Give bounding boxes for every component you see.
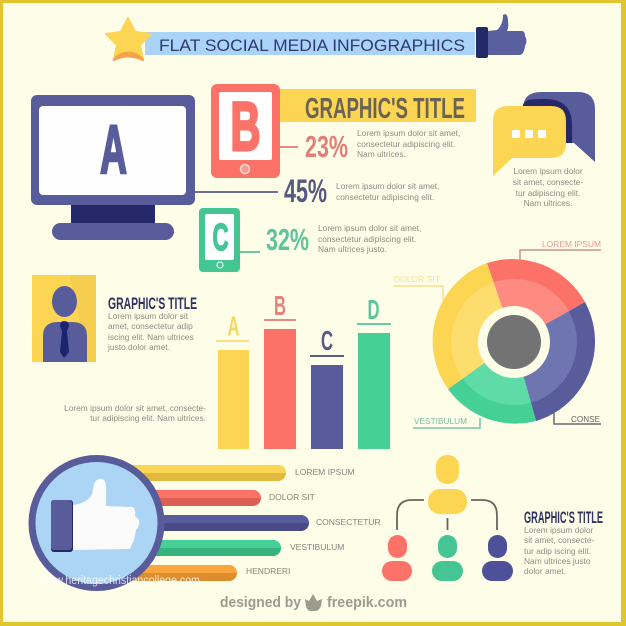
bar labels: VESTIBULUM <box>290 542 344 552</box>
text block: bubble caption: Lorem ipsum dolor <box>513 166 583 176</box>
icon: speech bubbles <box>493 92 595 176</box>
heading and text: person: Lorem ipsum dolor sit <box>108 311 189 321</box>
label: vestibulum <box>413 416 480 428</box>
icon: thumbs up <box>476 14 526 58</box>
org chart <box>382 455 513 581</box>
heading and text: person <box>107 294 197 352</box>
23% stat: 23% <box>305 129 348 164</box>
text block: bar chart note: Lorem ipsum dolor sit amet, consecte- <box>64 403 206 413</box>
label: dolor sit <box>393 274 443 300</box>
23% stat <box>280 128 460 164</box>
text block: bubble caption: sit amet, consecte- <box>513 177 583 187</box>
footer credit: freepik.com <box>327 595 407 611</box>
phone C: C <box>212 217 228 259</box>
bar chart <box>216 290 391 449</box>
footer credit <box>220 594 407 611</box>
heading and text: org chart <box>524 509 603 576</box>
heading and text: person: GRAPHIC'S TITLE <box>108 294 197 313</box>
45% stat: 45% <box>284 173 327 209</box>
45% stat <box>195 173 439 209</box>
icon: like badge <box>32 458 161 588</box>
icon: star <box>106 18 151 60</box>
bar chart: A <box>228 310 240 342</box>
label: lorem ipsum: LOREM IPSUM <box>542 239 601 249</box>
monitor A <box>31 95 195 240</box>
watermark: www.heritagechristiancollege.com <box>39 575 200 587</box>
32% stat: consectetur adipiscing elit. <box>318 234 416 244</box>
bar labels: LOREM IPSUM <box>295 467 355 477</box>
heading and text: person: amet, consectetur adip <box>108 321 193 331</box>
45% stat: Lorem ipsum dolor sit amet, <box>336 181 439 191</box>
45% stat: consectetur adipiscing elit. <box>336 192 434 202</box>
bar chart: D <box>368 294 380 325</box>
phone B <box>211 84 280 178</box>
footer credit: designed by <box>220 595 301 611</box>
text block: bubble caption <box>513 166 583 208</box>
monitor A: A <box>100 111 127 188</box>
label: lorem ipsum <box>520 239 601 262</box>
text block: bubble caption: tur adipiscing elit. <box>516 188 580 198</box>
heading and text: org chart: tur adip iscing elit. <box>524 546 591 556</box>
bar labels <box>246 467 381 576</box>
text block: bar chart note: tur adipiscing elit. Nam ultrices. <box>90 413 206 423</box>
32% stat: Lorem ipsum dolor sit amet, <box>318 223 421 233</box>
bar chart: B <box>274 290 286 321</box>
label: conse <box>554 413 601 424</box>
23% stat: consectetur adipiscing elit. <box>357 139 455 149</box>
phone C <box>199 208 240 272</box>
heading and text: person: iscing elit. Nam ultrices <box>108 332 194 342</box>
bar labels: DOLOR SIT <box>269 492 315 502</box>
donut chart <box>433 259 595 424</box>
32% stat <box>240 222 421 257</box>
heading and text: org chart: Nam ultrices justo <box>524 556 591 566</box>
23% stat: Nam ultrices. <box>357 149 406 159</box>
heading and text: org chart: Lorem ipsum dolor <box>524 525 594 535</box>
heading and text: person: justo dolor amet. <box>107 342 170 352</box>
icon: person portrait <box>32 275 96 362</box>
phone B: B <box>230 88 260 165</box>
heading and text: org chart: sit amet, consecte- <box>524 535 594 545</box>
heading: graphic's title banner <box>280 89 476 125</box>
horizontal bars <box>100 465 309 581</box>
23% stat: Lorem ipsum dolor sit amet, <box>357 128 460 138</box>
label: vestibulum: VESTIBULUM <box>414 416 467 426</box>
label: dolor sit: DOLOR SIT <box>394 274 440 284</box>
bar labels: HENDRERI <box>246 566 290 576</box>
heading: graphic's title banner: GRAPHIC'S TITLE <box>305 93 465 125</box>
32% stat: 32% <box>266 222 309 257</box>
bar labels: CONSECTETUR <box>316 517 381 527</box>
bar chart: C <box>321 325 333 356</box>
heading and text: org chart: dolor amet. <box>524 566 566 576</box>
text block: bubble caption: Nam ultrices. <box>524 198 572 208</box>
32% stat: Nam ultrices justo. <box>318 244 387 254</box>
label: conse: CONSE <box>571 414 600 424</box>
text block: bar chart note <box>64 403 206 423</box>
title banner: FLAT SOCIAL MEDIA INFOGRAPHICS <box>159 36 465 55</box>
